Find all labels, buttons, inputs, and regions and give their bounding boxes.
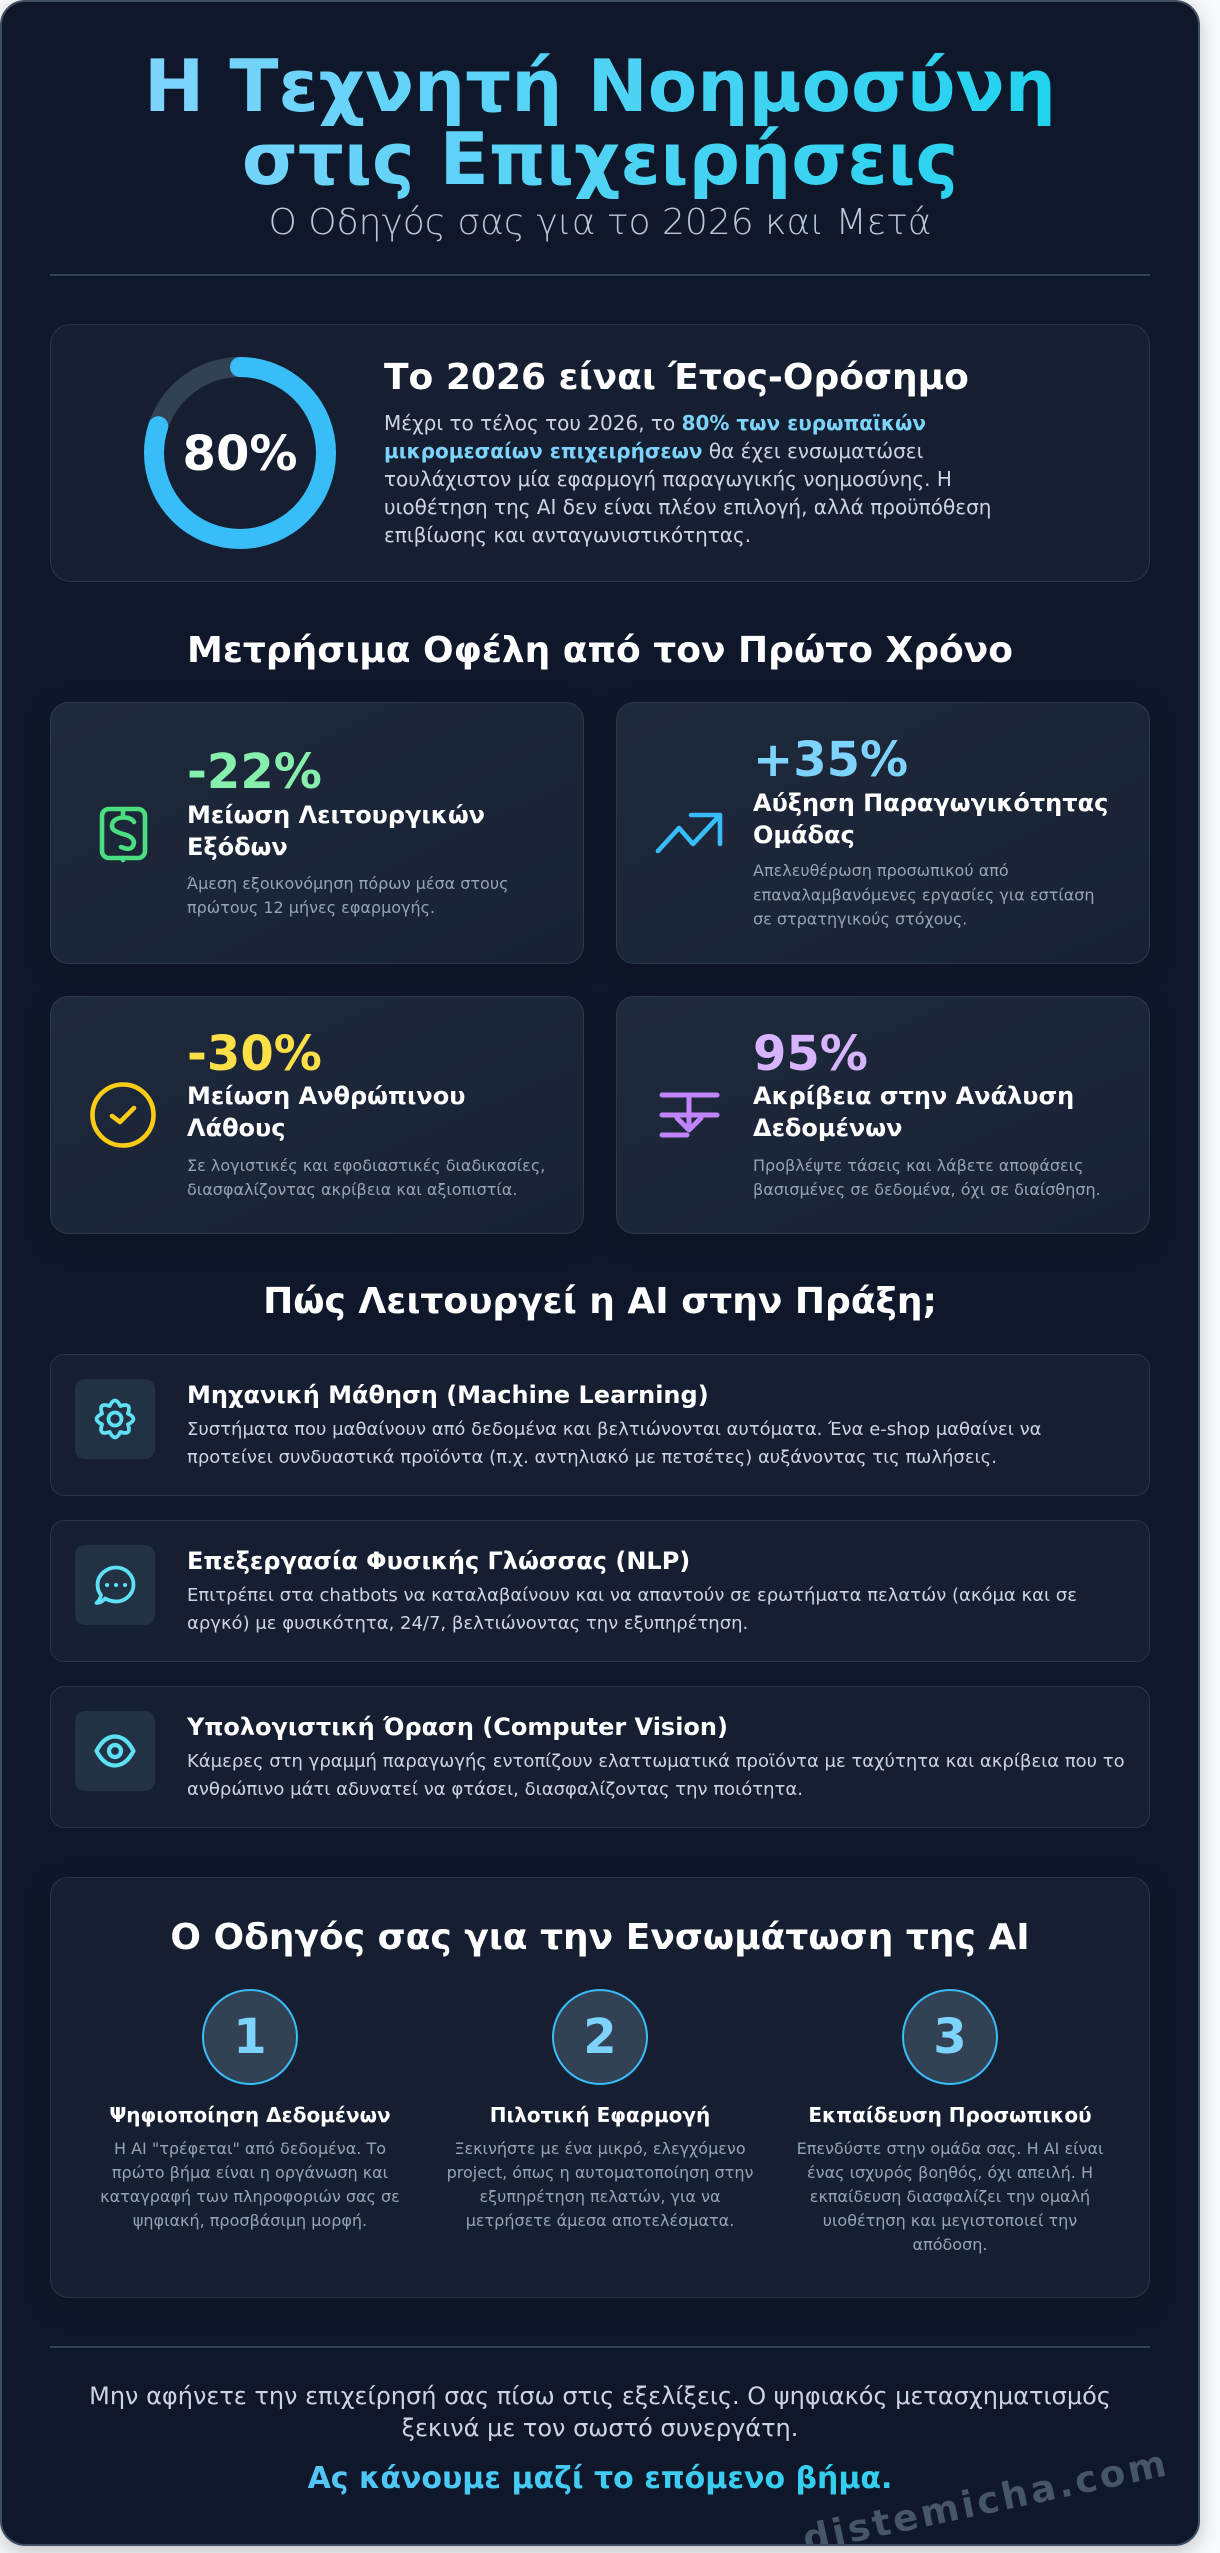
stat title: Μείωση Ανθρώπινου — [187, 1082, 465, 1110]
title: στις Επιχειρήσεις — [242, 117, 958, 201]
panel: computer vision — [50, 1686, 1150, 1828]
step 1: 1 — [233, 2009, 267, 2065]
row title: Επεξεργασία Φυσικής Γλώσσας (NLP) — [187, 1547, 690, 1575]
icon box — [75, 1545, 155, 1625]
stat value: +35% — [753, 732, 908, 788]
title: Η Τεχνητή Νοημοσύνη — [144, 44, 1056, 128]
row description: αργκό) με φυσικότητα, 24/7, βελτιώνοντας την εξυπηρέτηση. — [187, 1613, 748, 1634]
panel: NLP — [50, 1520, 1150, 1662]
panel: card -30% — [50, 996, 584, 1234]
icon box — [75, 1379, 155, 1459]
stat title — [753, 1082, 1074, 1142]
chart: 80% progress ring — [154, 367, 326, 539]
step 3: εκπαίδευση διασφαλίζει την ομαλή — [810, 2187, 1090, 2206]
stat title: Εξόδων — [187, 833, 288, 861]
milestone text: μικρομεσαίων επιχειρήσεων θα έχει ενσωματώσει — [384, 439, 924, 463]
step 1 — [100, 1990, 400, 2230]
step 1: πρώτο βήμα είναι η οργάνωση και — [112, 2163, 388, 2182]
milestone text: Μέχρι το τέλος του 2026, το 80% των ευρωπαϊκών — [384, 411, 926, 435]
row description — [187, 1751, 1125, 1800]
milestone text: υιοθέτηση της AI δεν είναι πλέον επιλογή, αλλά προϋπόθεση — [384, 495, 991, 519]
step 2: Ξεκινήστε με ένα μικρό, ελεγχόμενο — [454, 2139, 746, 2158]
step 1: καταγραφή των πληροφοριών σας σε — [100, 2187, 400, 2206]
panel: card 95% — [616, 996, 1150, 1234]
header — [144, 44, 1056, 243]
stat description: διασφαλίζοντας ακρίβεια και αξιοπιστία. — [187, 1180, 517, 1199]
stat description — [753, 1156, 1101, 1199]
icon: check circle — [92, 1084, 154, 1146]
stat description: Άμεση εξοικονόμηση πόρων μέσα στους — [187, 874, 508, 893]
step 1: Η AI "τρέφεται" από δεδομένα. Το — [114, 2139, 386, 2158]
stat value: 95% — [753, 1026, 868, 1082]
step 3 — [797, 1990, 1103, 2254]
footer text — [89, 2382, 1111, 2442]
guide heading: Ο Οδηγός σας για την Ενσωμάτωση της AI — [170, 1917, 1030, 1958]
icon: dollar — [102, 809, 145, 860]
icon: gear — [97, 1401, 133, 1437]
stat description: σε στρατηγικούς στόχους. — [753, 910, 967, 928]
step 3: Εκπαίδευση Προσωπικού — [808, 2103, 1092, 2127]
row title: Μηχανική Μάθηση (Machine Learning) — [187, 1381, 709, 1409]
stat title: Ακρίβεια στην Ανάλυση — [753, 1082, 1074, 1110]
stat title — [187, 801, 485, 861]
row description: Επιτρέπει στα chatbots να καταλαβαίνουν και να απαντούν σε ερωτήματα πελατών (ακόμα και σε — [187, 1585, 1077, 1606]
step 2 — [447, 1990, 753, 2230]
stat title: Δεδομένων — [753, 1114, 902, 1142]
icon: data filter — [662, 1095, 717, 1135]
stat description — [187, 1156, 545, 1199]
chart: 80% progress ring: 80% — [183, 426, 297, 482]
row description — [187, 1419, 1042, 1468]
stat description: Απελευθέρωση προσωπικού από — [753, 861, 1009, 880]
icon: trend up — [658, 815, 720, 851]
step 2: project, όπως η αυτοματοποίηση στην — [447, 2163, 753, 2182]
panel: card +35% — [616, 702, 1150, 964]
stat description — [753, 861, 1095, 928]
row title: Υπολογιστική Όραση (Computer Vision) — [186, 1713, 728, 1741]
icon box — [75, 1711, 155, 1791]
stat title — [187, 1082, 465, 1142]
row description: Κάμερες στη γραμμή παραγωγής εντοπίζουν ελαττωματικά προϊόντα με ταχύτητα και ακρίβεια που το — [187, 1751, 1125, 1772]
stat description: Προβλέψτε τάσεις και λάβετε αποφάσεις — [753, 1156, 1083, 1175]
stat title — [753, 789, 1108, 849]
step 1: ψηφιακή, προσβάσιμη μορφή. — [133, 2211, 367, 2230]
call to action: Ας κάνουμε μαζί το επόμενο βήμα. — [308, 2461, 892, 2496]
row description: ανθρώπινο μάτι αδυνατεί να φτάσει, διασφαλίζοντας την ποιότητα. — [187, 1779, 803, 1800]
stat description: βασισμένες σε δεδομένα, όχι σε διαίσθηση. — [753, 1180, 1101, 1199]
step 3: Επενδύστε στην ομάδα σας. Η AI είναι — [797, 2139, 1103, 2158]
footer text: Μην αφήνετε την επιχείρησή σας πίσω στις εξελίξεις. Ο ψηφιακός μετασχηματισμός — [89, 2382, 1111, 2410]
step 3: ένας ισχυρός βοηθός, όχι απειλή. Η — [807, 2163, 1093, 2182]
stat title: Αύξηση Παραγωγικότητας — [753, 789, 1108, 817]
row description — [187, 1585, 1077, 1634]
stat title: Μείωση Λειτουργικών — [187, 801, 485, 829]
milestone text — [384, 411, 991, 547]
stat description: επαναλαμβανόμενες εργασίες για εστίαση — [753, 886, 1095, 904]
row description: Συστήματα που μαθαίνουν από δεδομένα και βελτιώνονται αυτόματα. Ένα e-shop μαθαίνει να — [187, 1419, 1042, 1440]
step 3: 3 — [933, 2009, 967, 2065]
stat description — [187, 874, 508, 917]
milestone heading: Το 2026 είναι Έτος-Ορόσημο — [384, 357, 969, 398]
title — [144, 44, 1056, 201]
footer text: ξεκινά με τον σωστό συνεργάτη. — [402, 2414, 798, 2442]
icon: eye — [96, 1736, 134, 1766]
step 2: Πιλοτική Εφαρμογή — [490, 2103, 710, 2127]
step 2: 2 — [583, 2009, 617, 2065]
subtitle: Ο Οδηγός σας για το 2026 και Μετά — [268, 202, 932, 243]
step 3: υιοθέτηση και μεγιστοποιεί την — [823, 2211, 1077, 2230]
step 2: εξυπηρέτηση πελατών, για να — [480, 2187, 720, 2206]
stat value: -30% — [187, 1026, 322, 1082]
panel: machine learning — [50, 1354, 1150, 1496]
panel: 2026 milestone — [50, 324, 1150, 582]
stat title: Λάθους — [187, 1114, 285, 1142]
milestone text: τουλάχιστον μία εφαρμογή παραγωγικής νοημοσύνης. Η — [384, 467, 952, 491]
stat description: πρώτους 12 μήνες εφαρμογής. — [187, 898, 435, 917]
step 2: μετρήσετε άμεσα αποτελέσματα. — [466, 2211, 734, 2230]
step 3: απόδοση. — [913, 2235, 987, 2254]
heading: how AI works: Πώς Λειτουργεί η AI στην Πράξη; — [263, 1281, 937, 1322]
row description: προτείνει συνδυαστικά προϊόντα (π.χ. αντηλιακό με πετσέτες) αυξάνοντας τις πωλήσεις. — [187, 1447, 997, 1468]
stat description: Σε λογιστικές και εφοδιαστικές διαδικασίες, — [187, 1156, 545, 1175]
icon: chat bubble — [96, 1568, 134, 1603]
heading: measurable benefits: Μετρήσιμα Οφέλη από τον Πρώτο Χρόνο — [187, 630, 1013, 671]
stat value: -22% — [187, 744, 322, 800]
milestone text: επιβίωσης και ανταγωνιστικότητας. — [384, 523, 751, 547]
step 1: Ψηφιοποίηση Δεδομένων — [109, 2103, 391, 2127]
panel: card -22% — [50, 702, 584, 964]
panel: integration guide — [50, 1878, 1150, 2298]
stat title: Ομάδας — [753, 821, 855, 849]
